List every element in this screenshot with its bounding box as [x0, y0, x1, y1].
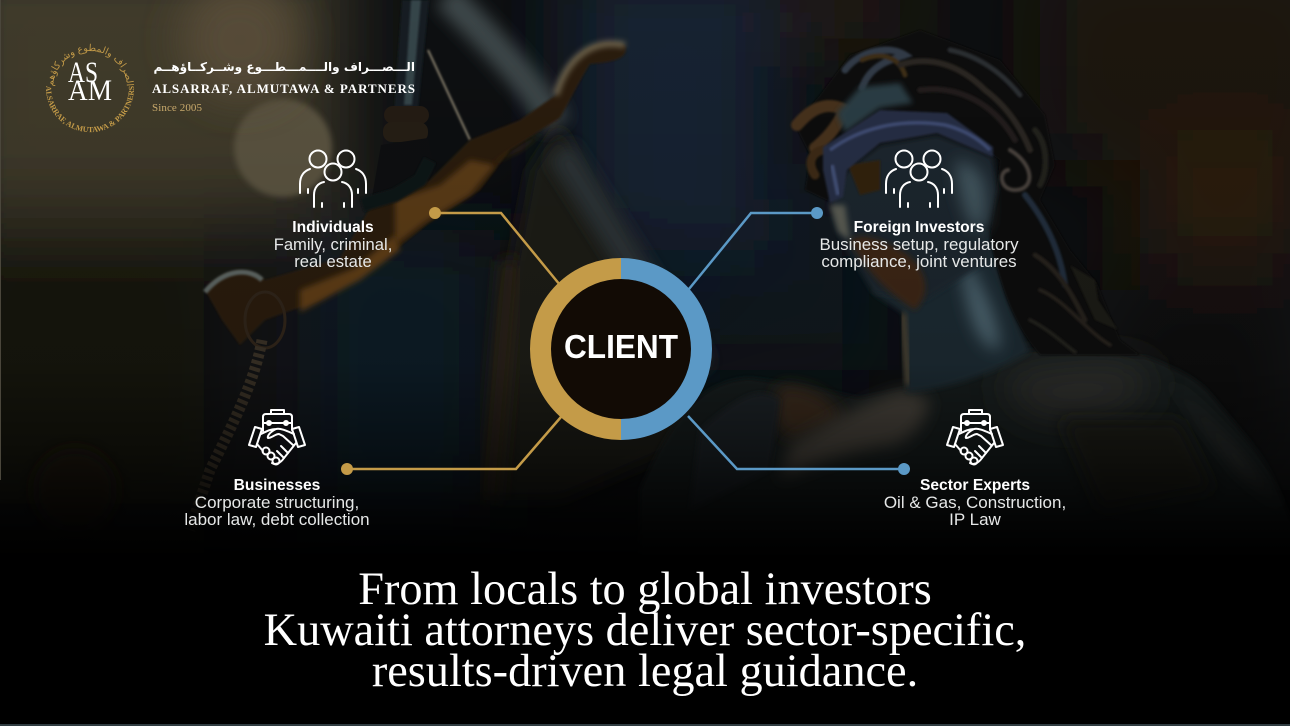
client ring: [540, 268, 702, 430]
forehead: [837, 83, 913, 133]
statue body: [640, 30, 1290, 726]
title: From locals to global investors: [358, 564, 932, 615]
card: foreign investors: [819, 219, 1019, 271]
logo arabic name: الـــصـــراف والــــمـــطـــوع وشــركــاؤهــم: [153, 60, 415, 75]
scale beam: [205, 43, 626, 348]
card: businesses: Corporate structuring,: [195, 493, 359, 512]
icon: handshake and briefcase, sector experts: [947, 410, 1003, 464]
card: sector experts: Sector Experts: [920, 477, 1030, 494]
sword: [372, 0, 470, 197]
card: businesses: labor law, debt collection: [184, 510, 370, 529]
connector: sector experts: [688, 416, 910, 475]
card: individuals: Individuals: [292, 219, 374, 236]
face: [830, 135, 997, 300]
cloth behind beam: [490, 125, 700, 500]
logo since: Since 2005: [152, 102, 202, 114]
card: sector experts: IP Law: [949, 510, 1001, 529]
icon: handshake and briefcase, businesses: [249, 410, 305, 464]
title: results-driven legal guidance.: [372, 646, 918, 697]
neck: [873, 230, 1030, 392]
client ring: CLIENT: [564, 328, 678, 365]
connector: businesses: [341, 417, 561, 475]
hair: [795, 30, 1140, 355]
card: sector experts: Oil & Gas, Construction,: [884, 493, 1066, 512]
bokeh: [234, 99, 332, 197]
title: [264, 564, 1026, 697]
card: individuals: [274, 219, 392, 271]
logo english name: ALSARRAF, ALMUTAWA & PARTNERS: [152, 81, 415, 96]
card: foreign investors: Foreign Investors: [854, 219, 984, 236]
card: individuals: Family, criminal,: [274, 235, 392, 254]
logo seal: AS: [68, 56, 98, 89]
card: foreign investors: compliance, joint ventures: [821, 252, 1017, 271]
card: foreign investors: Business setup, regulatory: [819, 235, 1019, 254]
icon: people, individuals: [300, 150, 366, 207]
torso: [640, 350, 1290, 726]
connector: individuals: [429, 207, 560, 285]
logo seal: ALSARRAF, ALMUTAWA & PARTNERS: [46, 86, 134, 132]
chain: [190, 340, 262, 530]
blindfold: [823, 110, 993, 203]
card: sector experts: [884, 477, 1066, 529]
logo seal: AM: [68, 74, 112, 107]
icon: people, foreign investors: [886, 150, 952, 207]
card: businesses: Businesses: [234, 477, 320, 494]
logo seal: الصراف والمطوع وشركاؤهم: [50, 44, 134, 86]
logo: [46, 44, 415, 132]
connector: foreign investors: [689, 207, 823, 289]
card: individuals: real estate: [294, 252, 372, 271]
card: businesses: [184, 477, 370, 529]
title: Kuwaiti attorneys deliver sector-specific,: [264, 605, 1026, 656]
logo seal: [46, 44, 134, 132]
